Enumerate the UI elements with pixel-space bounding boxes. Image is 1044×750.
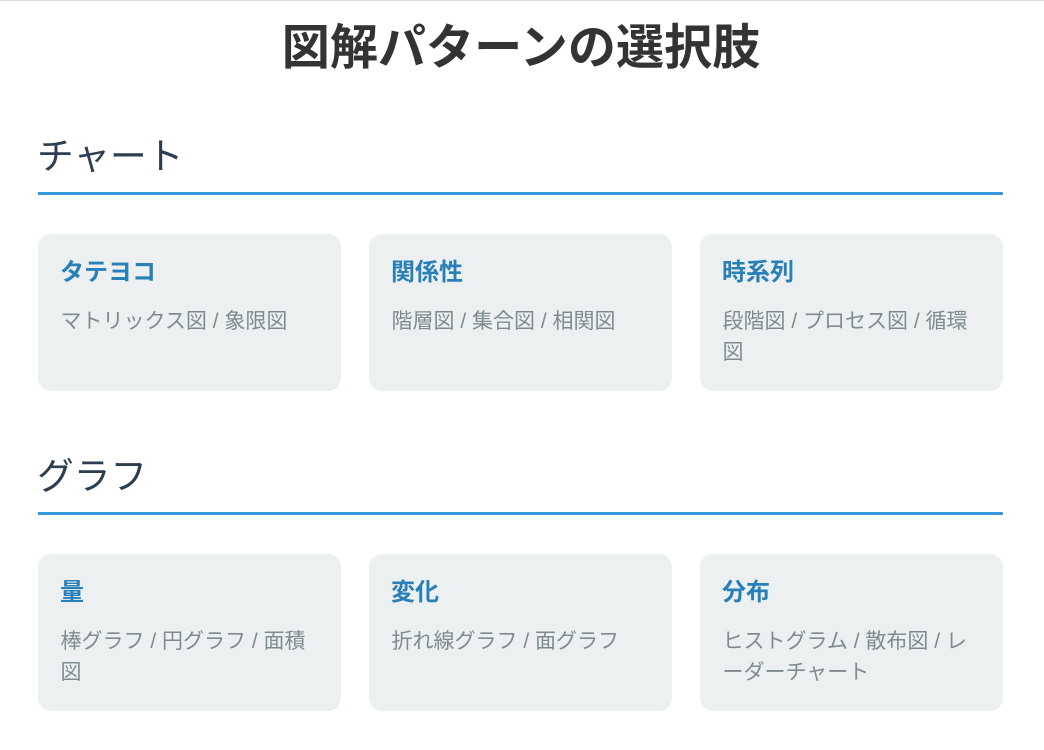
card: 関係性	[369, 234, 672, 391]
card: 時系列: 時系列	[722, 259, 794, 286]
card: 分布: 分布	[722, 579, 770, 606]
card: 変化: 変化	[391, 579, 439, 606]
card: タテヨコ	[38, 234, 341, 391]
card: 変化: 折れ線グラフ / 面グラフ	[392, 630, 619, 652]
card: 関係性: 関係性	[391, 259, 463, 286]
card: 時系列	[700, 234, 1003, 391]
section: チャート	[37, 136, 1003, 195]
section: グラフ	[37, 456, 1003, 515]
card: 量: 棒グラフ / 円グラフ / 面積図	[60, 630, 306, 684]
card: 分布	[700, 554, 1003, 711]
card: 量	[38, 554, 341, 711]
card: 量: 量	[60, 579, 84, 606]
card: 時系列: 段階図 / プロセス図 / 循環図	[722, 310, 968, 364]
card: 変化	[369, 554, 672, 711]
card: タテヨコ: タテヨコ	[60, 259, 156, 286]
section: グラフ: グラフ	[37, 456, 147, 497]
card: 分布: ヒストグラム / 散布図 / レーダーチャート	[722, 630, 967, 684]
card: タテヨコ: マトリックス図 / 象限図	[60, 310, 287, 332]
card: 関係性: 階層図 / 集合図 / 相関図	[392, 310, 616, 332]
title: 図解パターンの選択肢	[282, 21, 760, 75]
section: チャート: チャート	[37, 136, 183, 177]
